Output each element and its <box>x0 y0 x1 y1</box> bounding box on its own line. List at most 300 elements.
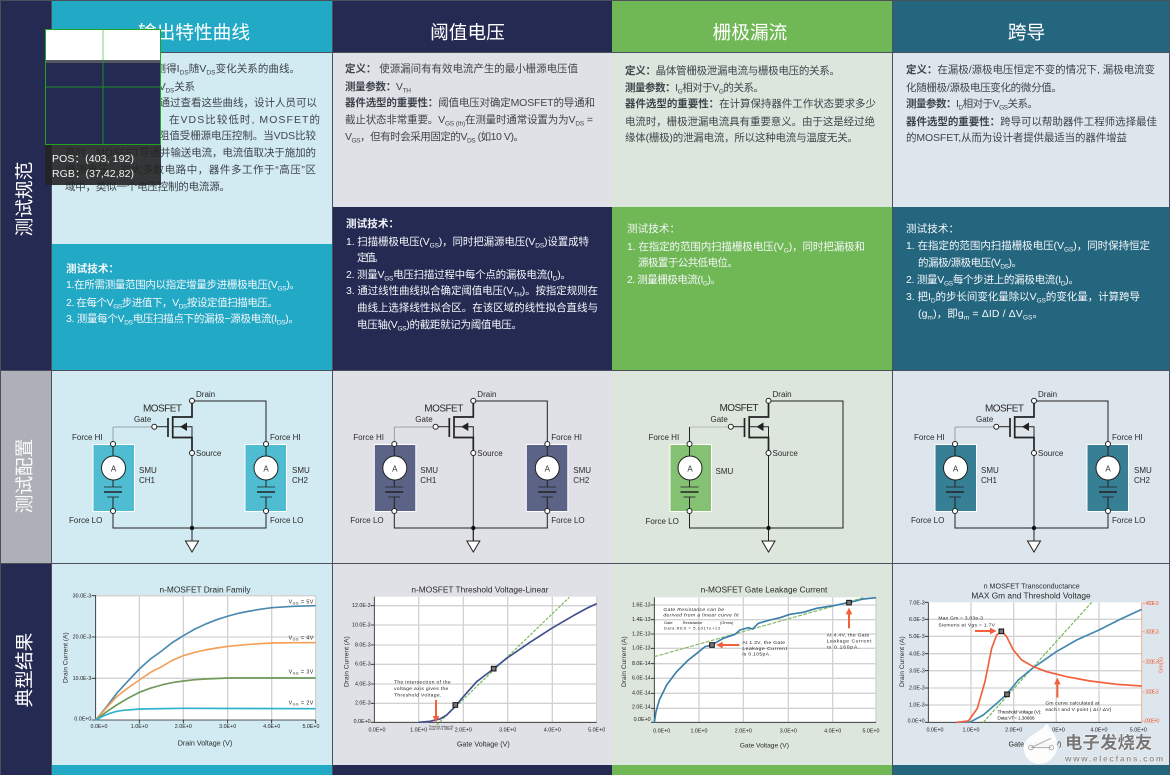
test technique text: gate leakage: 2. 测量栅极电流(I <box>627 274 703 286</box>
definition text: threshold voltage: = <box>584 114 593 126</box>
circuit labels: Force HI <box>1112 433 1143 442</box>
test technique text: output characteristic: DS <box>179 304 188 310</box>
test technique text: threshold voltage: GS <box>430 242 440 250</box>
annotations: (Ohms) <box>720 620 734 625</box>
circuit labels: Force HI <box>72 433 103 442</box>
test technique text: output characteristic: 2. 在每个V <box>66 297 114 309</box>
circuit labels <box>69 390 310 525</box>
test technique text: gate leakage: G <box>784 248 789 254</box>
circuit labels: Gate <box>976 415 994 424</box>
axis labels: 10.0E-3 <box>73 676 91 682</box>
panel: transconductance column specification <box>893 1 1169 370</box>
axis labels: GS <box>293 703 299 707</box>
circuit labels: SMU <box>420 466 438 475</box>
axis labels <box>632 602 880 735</box>
definition text: gate leakage: 器件选型的重要性：在计算保持器件工作状态要求多少 <box>625 97 876 110</box>
circuit labels: Source <box>1038 449 1064 458</box>
axis labels: 0.0E+0 <box>634 717 651 723</box>
test technique text: threshold voltage: 电压扫描过程中每个点的漏极电流(I <box>393 268 553 281</box>
axis labels: 1.4E-13 <box>632 617 651 623</box>
annotations: Gate Resistance can be <box>663 607 724 613</box>
axis labels: 6.0E-14 <box>632 676 651 682</box>
test technique text: output characteristic: 3. 测量每个V <box>66 313 125 325</box>
test technique text: threshold voltage <box>346 217 598 332</box>
panel: chart transconductance: Gate Voltage (V) <box>1009 740 1061 748</box>
definition text: output characteristic: 栅源电压。在大多数电路中，器件多工作于“高压”区 <box>65 163 316 176</box>
circuit labels: Source <box>772 449 798 458</box>
definition text: gate leakage <box>625 64 876 144</box>
definition text: threshold voltage: TH <box>403 88 411 94</box>
axis labels: 4.0E+0 <box>824 729 841 735</box>
axis labels: 5.0E-3 <box>909 634 925 640</box>
axis labels: 8.0E-14 <box>632 661 651 667</box>
test technique text: gate leakage: 源极置于公共低电位。 <box>638 256 738 269</box>
definition text: gate leakage: 相对于V <box>682 81 719 94</box>
panel: circuit configuration 4 <box>893 371 1169 563</box>
axis labels: 2.0E-3 <box>355 701 371 707</box>
definition text: gate leakage: 测量参数：I <box>625 82 678 94</box>
axis labels: 2.0E-3 <box>909 686 925 692</box>
test technique text: gate leakage: 1. 在指定的范围内扫描栅极电压(V <box>627 241 784 253</box>
axis labels: 1.0E+0 <box>131 724 148 730</box>
panel: chart transconductance: 300E-3 <box>1145 629 1159 635</box>
test technique text: transconductance: 的步长间变化量除以V <box>936 290 1037 303</box>
test technique text: output characteristic: GS <box>113 304 123 310</box>
test technique text: gate leakage <box>627 222 865 288</box>
axis labels: 1.0E-13 <box>632 646 651 652</box>
test technique text: transconductance: )。 <box>1008 257 1022 269</box>
annotations: Siemens at Vgs = 1.7V <box>938 622 996 628</box>
panel: circuit configuration 2 <box>333 371 612 563</box>
axis labels: = 5V <box>299 599 314 605</box>
test technique text: output characteristic: )。 <box>285 313 299 325</box>
test technique text: threshold voltage: 定值。 <box>357 251 384 264</box>
axis labels: 0.0E+0 <box>368 728 386 734</box>
magnifier overlay <box>45 29 161 185</box>
heading: transconductance: 跨导 <box>1008 22 1045 43</box>
test technique text: threshold voltage: TH <box>513 292 522 298</box>
definition text: output characteristic: 变化关系的曲线。 <box>216 62 300 75</box>
circuit labels: CH2 <box>573 476 590 485</box>
circuit labels: A <box>392 464 398 474</box>
test technique text: transconductance: 的漏极/源极电压(V <box>918 257 1001 269</box>
definition text: output characteristic: 下测得I <box>145 62 180 75</box>
test technique text: transconductance: m <box>928 314 933 322</box>
bottom colour bars <box>52 765 1169 775</box>
test technique text: threshold voltage: )的截距就记为阈值电压。 <box>406 318 522 331</box>
circuit labels: CH1 <box>420 476 437 485</box>
axis labels: = 2V <box>299 701 314 707</box>
axis labels: GS <box>293 601 299 605</box>
axis labels: 30.0E-3 <box>73 593 91 599</box>
test technique text: transconductance: = ΔID / ΔV <box>969 308 1023 320</box>
watermark: 电子发烧友 <box>1065 732 1152 752</box>
panel: chart transconductance: 100E-3 <box>1145 690 1159 696</box>
definition text: gate leakage: 电流时，栅极泄漏电流具有重要意义。由于这是经过绝 <box>625 115 876 128</box>
circuit labels: Drain <box>1038 390 1057 399</box>
axis labels: 10.0E-3 <box>352 622 371 628</box>
panel: chart threshold voltage: Data:VT=1.30666 <box>429 727 453 731</box>
axis labels: 4.0E-14 <box>632 691 651 697</box>
side label: typical results <box>1 564 51 775</box>
test technique text: transconductance: )，即g <box>933 308 964 320</box>
circuit labels: CH1 <box>139 476 156 485</box>
panel: chart transconductance: n MOSFET Transconductance <box>984 583 1080 591</box>
test technique text: threshold voltage: )设置成特 <box>544 236 590 248</box>
panel: threshold voltage column specification <box>333 1 612 370</box>
axis labels: 4.0E+0 <box>263 724 280 730</box>
circuit labels: SMU <box>573 466 591 475</box>
definition text: output characteristic: 工作方式类似电阻，阻值受栅源电压控制。当VDS比较 <box>65 129 316 142</box>
annotations: is 0.160pA. <box>827 644 859 650</box>
test technique text: threshold voltage: GS <box>384 276 394 282</box>
axis labels: 1.0E+0 <box>410 728 427 734</box>
circuit labels: CH2 <box>1134 476 1151 485</box>
panel: gate leakage column specification <box>612 1 892 370</box>
test technique text: threshold voltage: GS <box>398 326 407 332</box>
circuit labels: Source <box>477 449 503 458</box>
axis labels: 5.0E+0 <box>1130 727 1147 733</box>
circuit labels: MOSFET <box>985 404 1024 414</box>
axis labels: GS <box>293 672 299 676</box>
definition text: transconductance: 器件选型的重要性：跨导可以帮助器件工程师选择最佳 <box>906 115 1158 128</box>
test technique text: threshold voltage: )。 <box>557 269 571 281</box>
test technique text: gate leakage: )。 <box>707 274 721 286</box>
definition text: threshold voltage: DS <box>467 138 476 144</box>
circuit labels: SMU <box>292 466 310 475</box>
annotations: Gate <box>664 620 673 625</box>
definition text: output characteristic: 定义：在一定V <box>65 63 135 75</box>
annotations: At 1.3V, the Gate <box>742 640 785 646</box>
side label: typical results: 典型结果 <box>14 632 35 707</box>
annotations: derived from a linear curve fit <box>663 613 739 619</box>
circuit labels: Force LO <box>646 517 679 526</box>
test technique text: threshold voltage: 2. 测量V <box>346 269 384 281</box>
definition text: threshold voltage: GS (th) <box>445 120 465 128</box>
definition text: output characteristic: DS <box>119 88 129 94</box>
definition text: output characteristic: 域中，类似一个电压控制的电流源。 <box>65 180 230 193</box>
test technique text: transconductance: GS <box>1023 314 1033 322</box>
axis labels: 0.0E+0 <box>926 727 944 733</box>
panel: chart threshold voltage: The intersection of the <box>394 679 451 685</box>
test technique text: output characteristic: 电压扫描点下的漏极−源极电流(I <box>133 312 277 325</box>
axis labels <box>73 593 320 730</box>
definition text: output characteristic: 关系 <box>174 80 195 93</box>
test technique text: gate leakage: 测试技术： <box>627 222 680 235</box>
definition text: threshold voltage <box>345 62 595 144</box>
axis labels: GS <box>293 638 299 642</box>
test technique text: transconductance <box>906 222 1150 322</box>
circuit labels: Drain <box>477 390 496 399</box>
definition text: threshold voltage: GS <box>352 138 361 144</box>
axis labels: 4.0E-3 <box>355 681 371 687</box>
axis labels: 7.0E-3 <box>909 601 925 607</box>
test technique text: threshold voltage: 1. 扫描栅极电压(V <box>346 236 430 248</box>
circuit labels: Drain <box>196 390 215 399</box>
axis labels: 12.0E-3 <box>352 603 371 609</box>
circuit labels: A <box>687 464 693 474</box>
test technique text: output characteristic: GS <box>278 286 287 292</box>
definition text: output characteristic: 随V <box>189 62 206 75</box>
side label: test specification <box>1 1 51 370</box>
circuit labels: Force LO <box>270 516 303 525</box>
circuit labels: Gate <box>134 415 152 424</box>
panel: chart threshold voltage: voltage axis gives the <box>394 686 449 692</box>
circuit labels: SMU <box>981 466 999 475</box>
circuit labels: Force HI <box>914 433 945 442</box>
panel: chart gate leakage: Gate Voltage (V) <box>740 742 789 749</box>
annotations: Gm curve calculated at <box>1045 701 1100 707</box>
test technique text: transconductance: GS <box>1037 298 1047 304</box>
circuit labels: Drain <box>772 390 792 399</box>
axis labels: 1.0E+0 <box>962 727 980 733</box>
definition text: threshold voltage: V <box>345 131 352 143</box>
circuit labels: Force HI <box>551 433 582 442</box>
definition text: transconductance: 化随栅极/源极电压变化的微分值。 <box>906 81 1062 94</box>
annotations: At 4.4V, the Gate <box>827 633 870 639</box>
panel: chart gate leakage <box>612 564 892 765</box>
annotations: Max Gm = 3.03e-3 <box>938 615 983 621</box>
circuit labels <box>911 390 1152 525</box>
circuit labels: A <box>111 464 117 474</box>
axis labels: 1.0E+0 <box>690 729 708 735</box>
axis labels: 5.0E+0 <box>862 729 880 735</box>
axis labels <box>908 601 1147 733</box>
circuit labels: Gate <box>415 415 433 424</box>
definition text: output characteristic: 确定器件的工作点。在VDS比较低时, MOSFET的 <box>65 113 320 126</box>
axis labels: 1.2E-13 <box>632 631 651 637</box>
side label: test configuration <box>1 371 51 563</box>
axis labels: 8.0E-3 <box>355 642 371 648</box>
axis labels: 2.0E+0 <box>175 724 192 730</box>
definition text: output characteristic: 器件选型的重要性：通过查看这些曲线，设计人员可以 <box>65 96 318 109</box>
test technique text: transconductance: 3. 把I <box>906 291 931 303</box>
panel: chart transconductance: 200E-3 <box>1145 659 1159 665</box>
test technique text: output characteristic: 1.在所需测量范围内以指定增量步进栅极电压(V <box>66 279 278 291</box>
circuit labels: A <box>263 464 269 474</box>
test technique text: threshold voltage: )。按指定规则在 <box>522 284 598 297</box>
test technique text: output characteristic: 按设定值扫描电压。 <box>187 296 278 309</box>
axis labels: 4.0E+0 <box>1090 727 1108 733</box>
panel: chart drain family <box>52 564 332 765</box>
annotations: Data:RES = 5.1017e+13 <box>664 626 721 631</box>
panel: chart transconductance <box>893 564 1169 765</box>
test technique text: transconductance: DS <box>1000 264 1010 270</box>
panel: circuit configuration 3 <box>612 371 892 563</box>
panel: chart threshold voltage: n-MOSFET Threshold Voltage-Linear <box>411 585 549 595</box>
circuit labels: Gate <box>710 415 728 424</box>
circuit labels: Force LO <box>69 516 102 525</box>
circuit labels: A <box>545 464 551 474</box>
axis labels: 5.0E+0 <box>302 724 320 730</box>
definition text: threshold voltage: 测量参数：V <box>345 81 403 93</box>
annotation arrows <box>975 631 1057 698</box>
panel: chart drain family: Drain Voltage (V) <box>178 739 232 747</box>
annotations <box>938 615 1112 721</box>
panel: chart drain family: n-MOSFET Drain Family <box>159 585 251 595</box>
test technique text: transconductance: 。 <box>1032 308 1043 320</box>
axis labels: 3.0E+0 <box>1048 727 1065 733</box>
magnifier readout: POS：(403, 192) <box>52 153 134 165</box>
annotations: is 0.105pA. <box>742 652 771 658</box>
heading: output characteristic: 输出特性曲线 <box>138 22 250 43</box>
definition text: transconductance: 的MOSFET,从而为设计者提供最适当的器件增益 <box>906 131 1128 144</box>
test technique text: transconductance: 每个步进上的漏极电流(I <box>953 273 1061 286</box>
axis labels: 3.0E+0 <box>780 729 797 735</box>
test technique text: transconductance: (g <box>918 308 927 320</box>
axis labels: 0.0E+0 <box>653 729 670 735</box>
test technique text: transconductance: 2. 测量V <box>906 274 944 286</box>
panel: chart threshold voltage: Gate Voltage (V) <box>457 740 510 748</box>
side label: test configuration: 测试配置 <box>14 439 35 513</box>
fit line and curve <box>437 597 569 725</box>
circuit labels: MOSFET <box>720 403 758 414</box>
annotations <box>663 607 872 658</box>
definition text: gate leakage: 的关系。 <box>723 81 764 94</box>
test technique text: threshold voltage: D <box>553 276 558 282</box>
axis labels: 1.0E-3 <box>909 703 925 709</box>
axis labels: 0.0E+0 <box>90 724 108 730</box>
circuit labels: Force LO <box>350 516 384 525</box>
circuit labels: SMU <box>139 466 157 475</box>
axis labels: 2.0E-14 <box>632 704 651 710</box>
axis labels: 0.0E+0 <box>354 719 371 725</box>
test technique text: threshold voltage: 测试技术： <box>346 217 399 230</box>
circuit labels: MOSFET <box>143 404 182 414</box>
test technique text: output characteristic: 步进值下，V <box>122 296 179 309</box>
definition text: threshold voltage: 截止状态非常重要。V <box>345 114 445 126</box>
test technique text: threshold voltage: )，同时把漏源电压(V <box>439 235 535 248</box>
circuit labels: Force HI <box>648 433 679 442</box>
definition text: output characteristic: DS <box>206 70 216 76</box>
test technique text: output characteristic <box>66 262 300 326</box>
axis labels: 2.0E+0 <box>735 729 752 735</box>
curves <box>96 606 316 720</box>
definition text: threshold voltage: DS <box>575 120 585 128</box>
circuit labels: SMU <box>716 467 734 476</box>
circuit labels: Force LO <box>1112 516 1145 525</box>
definition text: transconductance <box>906 63 1158 144</box>
definition text: output characteristic: GS <box>135 70 146 76</box>
definition text: gate leakage: G <box>719 88 724 96</box>
axis labels <box>352 603 605 734</box>
panel: chart threshold voltage: Threshold Voltage. <box>394 693 441 699</box>
curves <box>983 602 1092 722</box>
test technique text: gate leakage: )，同时把漏极和 <box>789 240 865 253</box>
test technique text: gate leakage: G <box>703 280 708 288</box>
circuit labels: A <box>953 464 959 474</box>
panel: chart gate leakage: Drain Current (A) <box>621 636 628 687</box>
test technique text: threshold voltage: 曲线上选择线性拟合区。在该区域的线性拟合直线与 <box>357 301 598 314</box>
circuit labels: Force LO <box>551 516 585 525</box>
test technique text: threshold voltage: DS <box>535 242 545 250</box>
definition text: transconductance: 定义：在漏极/源极电压恒定不变的情况下, 漏极电流变 <box>906 63 1156 76</box>
circuit labels: SMU <box>1134 466 1152 475</box>
annotations: Threshold Voltage (V): <box>997 710 1041 716</box>
axis labels: V <box>289 636 292 642</box>
axis labels: 3.0E+0 <box>499 728 516 734</box>
definition text: transconductance: 相对于V <box>963 97 1000 110</box>
panel: chart transconductance: .000E+0 <box>1144 719 1159 725</box>
axis labels: 5.0E+0 <box>588 728 605 734</box>
panel: chart threshold voltage <box>333 564 612 765</box>
test technique text: transconductance: GS <box>1064 246 1074 254</box>
circuit labels: CH1 <box>981 476 998 485</box>
axis labels: 0.0E+0 <box>74 716 91 722</box>
circuit labels: MOSFET <box>424 404 463 414</box>
axis labels: V <box>289 599 292 605</box>
heading: threshold voltage: 阈值电压 <box>430 22 505 43</box>
test technique text: output characteristic: )。 <box>286 279 300 291</box>
definition text: output characteristic: 相对于V <box>128 80 166 93</box>
fit line and curve <box>654 598 863 657</box>
panel: chart transconductance: Gm(S) <box>1159 657 1165 673</box>
axis labels: 0.0E+0 <box>908 719 925 725</box>
definition text: threshold voltage: 器件选型的重要性：阈值电压对确定MOSFET的导通和 <box>345 96 595 109</box>
panel: output characteristic column specification <box>52 1 332 370</box>
annotation arrows <box>722 613 849 645</box>
definition text: threshold voltage: (如10 V)。 <box>475 130 524 143</box>
definition text: transconductance: GS <box>999 104 1009 112</box>
definition text: output characteristic: DS <box>166 88 175 94</box>
annotations: Leakage Current <box>827 639 872 645</box>
definition text: transconductance: 关系。 <box>1008 97 1038 110</box>
panel: chart threshold voltage: Threshold Voltage (V): <box>429 724 454 728</box>
panel: chart transconductance: 400E-3 <box>1145 601 1159 607</box>
test technique text: threshold voltage: 3. 通过线性曲线拟合确定阈值电压(V <box>346 285 513 297</box>
panel: chart gate leakage: n-MOSFET Gate Leakage Current <box>701 585 828 595</box>
axis labels: V <box>289 670 292 676</box>
test technique text: transconductance: D <box>931 298 936 304</box>
axis labels: 2.0E+0 <box>455 728 472 734</box>
definition text: gate leakage: G <box>678 88 683 96</box>
test technique text: transconductance: 1. 在指定的范围内扫描栅极电压(V <box>906 240 1064 252</box>
axis labels: 3.0E+0 <box>219 724 236 730</box>
circuit labels: CH2 <box>292 476 309 485</box>
magnifier readout: RGB：(37,42,82) <box>52 168 134 180</box>
magnifier readout <box>52 153 134 180</box>
definition text: output characteristic: 测量参数：I <box>65 81 119 93</box>
panel: chart threshold voltage: Drain Current (A) <box>343 636 350 687</box>
annotations: Data:VT= 1.30666 <box>997 715 1035 721</box>
circuit labels: Force LO <box>911 516 944 525</box>
annotations: Resistance <box>683 620 703 625</box>
panel: chart transconductance: MAX Gm and Threshold Voltage <box>971 590 1091 600</box>
test technique text: transconductance: m <box>964 314 969 322</box>
axis labels: = 4V <box>299 636 314 642</box>
definition text: gate leakage: 定义：晶体管栅极泄漏电流与栅极电压的关系。 <box>625 64 840 77</box>
axis labels: 3.0E-3 <box>909 668 925 674</box>
test technique text: transconductance: GS <box>944 280 954 288</box>
definition text: threshold voltage: ，但有时会采用固定的V <box>360 130 467 143</box>
panel: circuit configuration 1 <box>52 371 332 563</box>
definition text: gate leakage: 缘体(栅极)的泄漏电流，所以这种电流与温度无关。 <box>625 131 858 144</box>
circuit labels <box>646 390 798 526</box>
axis labels: 6.0E-3 <box>355 662 371 668</box>
watermark <box>1024 724 1163 764</box>
axis labels: 4.0E+0 <box>544 728 561 734</box>
test technique text: transconductance: 测试技术： <box>906 222 959 235</box>
circuit labels: A <box>1105 464 1111 474</box>
axis labels: 2.0E+0 <box>1005 727 1022 733</box>
panel: chart transconductance: Drain Current (A) <box>899 636 906 687</box>
annotation arrow <box>433 700 439 717</box>
definition text: threshold voltage: 在测量时通常设置为为V <box>465 113 575 126</box>
circuit labels: Force HI <box>270 433 301 442</box>
definition text: threshold voltage: 定义： 使源漏间有有效电流产生的最小栅源电压值 <box>345 62 578 75</box>
test technique text: transconductance: 的变化量，计算跨导 <box>1046 290 1140 303</box>
axis labels: 1.6E-13 <box>632 602 651 608</box>
